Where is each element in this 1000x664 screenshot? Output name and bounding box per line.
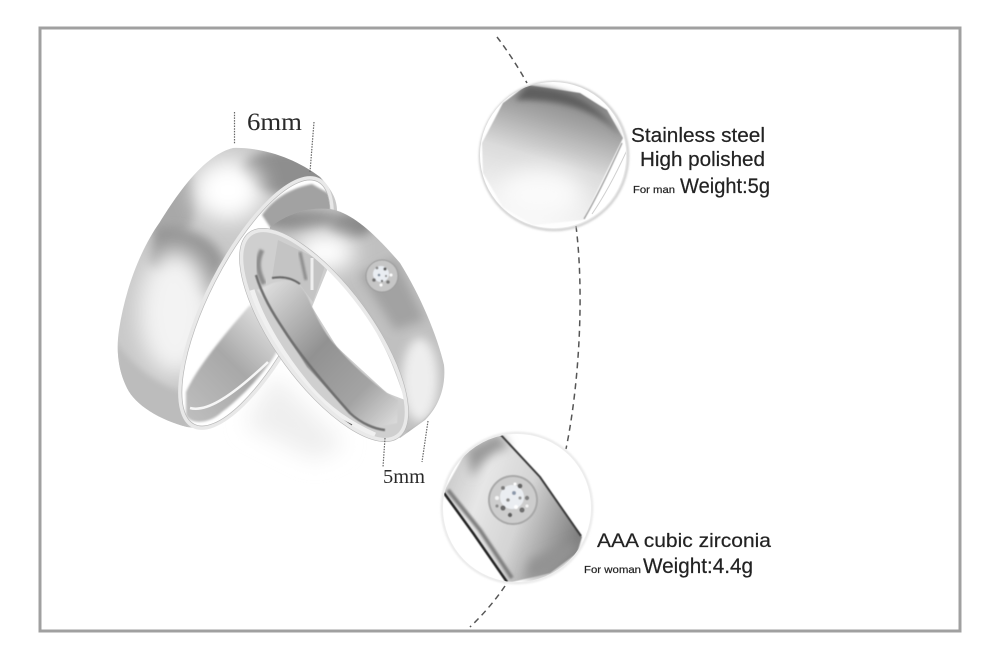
text: zirconia spec: AAA cubic zirconia <box>597 530 771 552</box>
polished rim <box>151 158 361 448</box>
upper interior <box>261 183 330 228</box>
man's ring (6mm) <box>118 148 337 430</box>
woman's ring (5mm) <box>239 208 444 442</box>
big ring seen through <box>272 240 326 302</box>
label: 5mm: 5mm <box>383 466 425 488</box>
text: stainless steel spec: High polished <box>640 149 765 171</box>
text: zirconia spec: Weight:4.4g <box>643 555 753 578</box>
text: stainless steel spec: Stainless steel <box>631 125 765 147</box>
dashed arc connector <box>470 37 580 627</box>
polished rim <box>213 206 435 464</box>
detail circle: zirconia stone <box>442 433 592 583</box>
detail circle: stainless steel <box>480 82 628 230</box>
icon: large zirconia stone <box>488 475 538 525</box>
text: zirconia spec: For woman <box>584 564 641 576</box>
opening base <box>213 206 435 464</box>
outer inner-wall stripe <box>252 290 375 435</box>
measure lines: 6mm <box>234 112 314 172</box>
lower interior <box>186 305 280 422</box>
ring opening <box>151 158 361 448</box>
icon: small zirconia stone <box>366 260 398 292</box>
text: stainless steel spec: For man <box>633 184 675 196</box>
label: 6mm: 6mm <box>247 109 303 136</box>
product photo: two rings <box>115 148 445 467</box>
text: stainless steel spec: Weight:5g <box>680 175 770 198</box>
inner surface <box>257 281 398 428</box>
measure lines: 5mm <box>383 421 428 467</box>
text: stainless steel spec <box>631 125 770 198</box>
groove <box>256 275 385 430</box>
cast shadow <box>245 375 345 460</box>
see-through area <box>312 268 405 400</box>
text: zirconia spec <box>584 530 771 578</box>
